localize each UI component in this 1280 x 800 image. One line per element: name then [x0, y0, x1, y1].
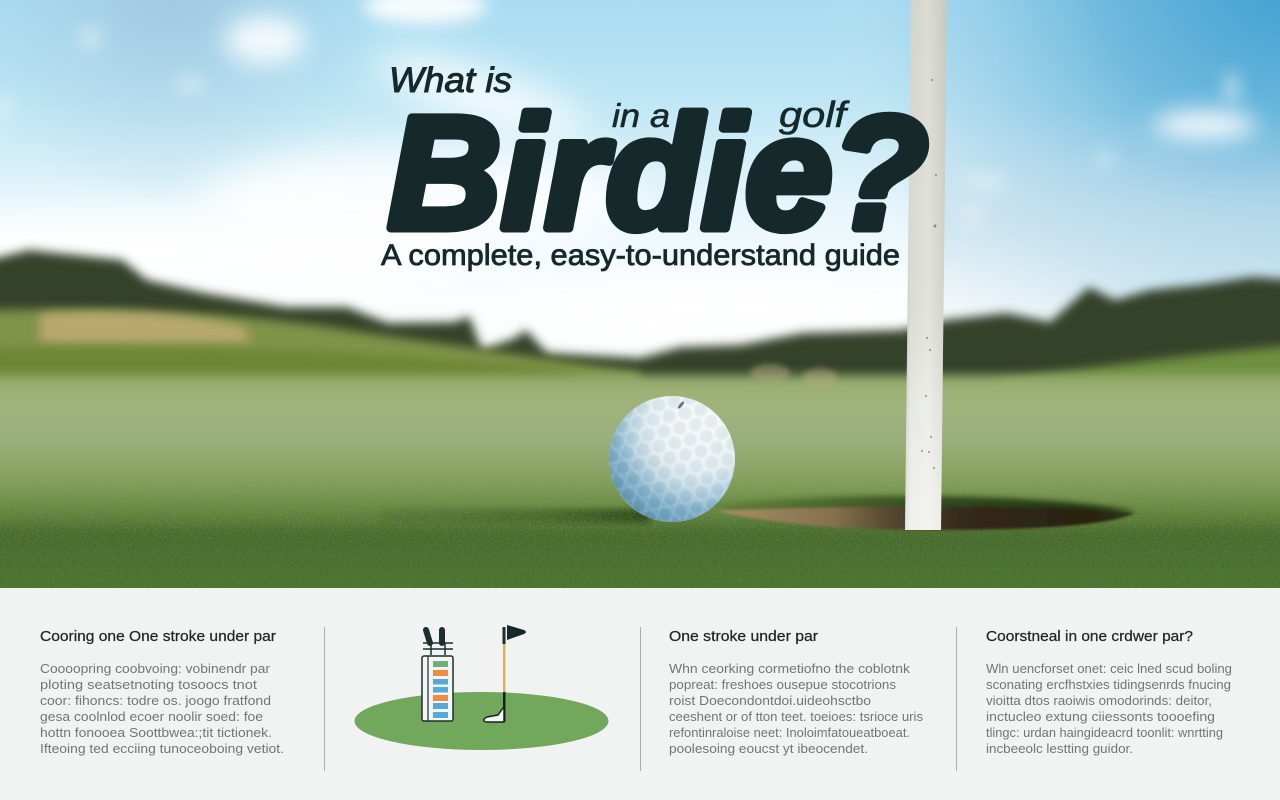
distant tree line: [0, 250, 1280, 395]
icon group: bag and flag on green: [354, 625, 608, 750]
inline: in a: in a: [612, 97, 670, 134]
hole shadow: [712, 496, 1136, 520]
column 1 body: Coooopring coobvoing: vobinendr par: [40, 662, 270, 676]
grey-blue sky top left: [0, 0, 420, 210]
column 1 body: [40, 662, 284, 756]
hero photo: golf green: [0, 0, 1280, 615]
main word: Birdie?: Birdie?: [388, 83, 928, 262]
grass speckle: [0, 498, 1280, 580]
green oval: [354, 692, 608, 750]
right hillside: [1000, 345, 1280, 395]
column 4 body: [986, 662, 1232, 756]
divider: [324, 627, 325, 771]
column 4 body: sconating ercfhstxies tidingsenrds fnucing: [986, 678, 1231, 692]
panel background: [0, 588, 1280, 800]
blurred marker posts: [750, 364, 837, 388]
column 1 body: ploting seatsetnoting tosoocs tnot: [40, 678, 258, 692]
column 3 body: popreat: freshoes ousepue stocotrions: [669, 678, 896, 692]
subtitle: A complete, easy-to-understand guide: [381, 239, 900, 272]
column 3 body: roist Doecondontdoi.uideohsctbo: [669, 694, 871, 708]
column 3 body: poolesoing eoucst yt ibeocendet.: [669, 742, 868, 756]
column 1 body: Ifteoing ted ecciing tunoceoboing vetiot.: [40, 742, 284, 756]
sky: [0, 0, 1280, 370]
grass texture: [5, 512, 1274, 588]
left hillside green band: [0, 347, 600, 385]
inline: golf: golf: [779, 94, 851, 135]
column 4 body: vioitta dtos raoiwis omodorinds: deitor,: [986, 694, 1212, 708]
column 1 body: gesa coolnlod ecoer noolir soed: foe: [40, 710, 263, 724]
column 4 body: inctucleo extung ciiessonts toooefing: [986, 710, 1215, 724]
hole: [716, 507, 1134, 530]
column 3 text: [669, 629, 923, 756]
icon: golf bag with clubs: [422, 630, 453, 721]
column 4 body: Wln uencforset onet: ceic lned scud boling: [986, 662, 1232, 676]
hazy band on right: [925, 110, 1280, 330]
column 3 body: Whn ceorking cormetiofno the coblotnk: [669, 662, 911, 676]
column 1 heading: Cooring one One stroke under par: [40, 629, 276, 645]
column 1 text: [40, 629, 284, 756]
bottom info panel: [0, 588, 1280, 800]
column 4 text: [986, 629, 1232, 756]
column 3 body: [669, 662, 923, 756]
column 4 heading: Coorstneal in one crdwer par?: [986, 629, 1193, 645]
column 3 body: refontinraloise neet: Inoloimfatoueatboeat.: [669, 726, 910, 740]
column 4 body: tlingc: urdan haingideacrd toonlit: wnrtting: [986, 726, 1223, 740]
column 3 heading: One stroke under par: [669, 629, 818, 645]
divider: [640, 627, 641, 771]
clouds: [0, 0, 1257, 338]
fairway: [0, 375, 1280, 615]
icon: flag and club: [484, 625, 526, 722]
left hillside: [0, 310, 640, 390]
column 1 body: coor: fihoncs: todre os. joogo fratfond: [40, 694, 271, 708]
divider: [956, 627, 957, 771]
golf ball: [609, 396, 735, 522]
column 1 body: hottn fonooea Soottbwea:;tit tictionek.: [40, 726, 272, 740]
column 4 body: incbeeolc lestting guidor.: [986, 742, 1133, 756]
kicker: What is: What is: [389, 61, 512, 100]
sand patch: [40, 312, 250, 343]
flag pole: [905, 0, 947, 530]
dark grass band: [380, 509, 650, 523]
title block: [381, 61, 928, 272]
deep blue sky on right: [780, 0, 1280, 370]
column 3 body: ceeshent or of tton teet. toeioes: tsrioce uris: [669, 710, 923, 724]
